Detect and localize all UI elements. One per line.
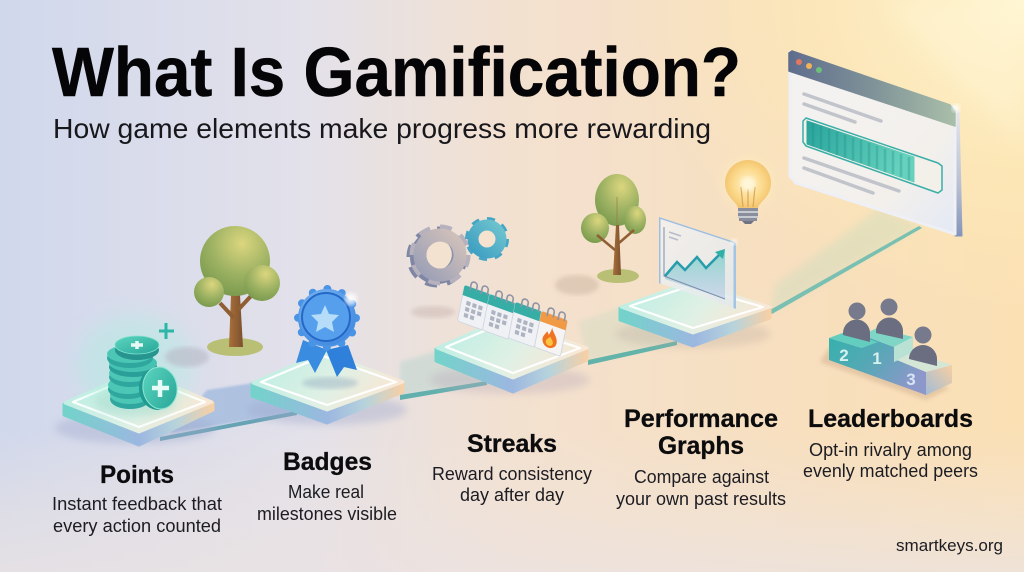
icon: light bulb bbox=[720, 155, 776, 224]
text block: badges bbox=[257, 448, 397, 524]
icon: tree small bbox=[555, 174, 646, 295]
text block: badges: milestones visible bbox=[257, 504, 397, 524]
text block: points: Points bbox=[100, 461, 174, 489]
text block: performance graphs: Compare against bbox=[634, 467, 769, 487]
text block: badges: Badges bbox=[283, 448, 372, 476]
platform: badges bbox=[247, 352, 407, 425]
source credit: smartkeys.org bbox=[896, 537, 1003, 555]
icon: streak calendars with flame bbox=[457, 279, 569, 356]
icon: podium with three people: 3 bbox=[906, 370, 916, 389]
title: What Is Gamification? bbox=[52, 33, 741, 111]
icon: gears bbox=[411, 220, 506, 318]
progress path bbox=[160, 208, 922, 441]
icon: ribbon badge bbox=[296, 289, 358, 389]
text block: leaderboards: Opt-in rivalry among bbox=[809, 440, 972, 460]
text block: performance graphs: Graphs bbox=[658, 432, 744, 460]
text block: leaderboards: Leaderboards bbox=[808, 405, 973, 433]
icon: tree bbox=[165, 226, 280, 367]
text block: leaderboards bbox=[803, 405, 978, 481]
text block: streaks: day after day bbox=[460, 485, 564, 505]
text block: performance graphs: your own past results bbox=[616, 489, 786, 509]
text block: streaks: Streaks bbox=[467, 430, 557, 458]
text block: badges: Make real bbox=[288, 482, 364, 502]
text block: performance graphs: Performance bbox=[624, 405, 778, 433]
platform: streaks bbox=[430, 319, 590, 394]
platform: performance graphs bbox=[615, 282, 771, 348]
platform: points bbox=[55, 371, 215, 445]
text block: leaderboards: evenly matched peers bbox=[803, 461, 978, 481]
subtitle: How game elements make progress more rewarding bbox=[53, 113, 711, 144]
icon: performance chart panel bbox=[659, 217, 737, 309]
text block: points: Instant feedback that bbox=[52, 494, 222, 514]
text block: points: every action counted bbox=[53, 516, 221, 536]
icon: podium with three people bbox=[820, 298, 952, 400]
icon: podium with three people: 2 bbox=[839, 346, 849, 365]
icon: coin stack with plus bbox=[77, 315, 193, 415]
icon: podium with three people: 1 bbox=[872, 349, 882, 368]
text block: streaks bbox=[432, 430, 592, 505]
text block: points bbox=[52, 461, 222, 536]
icon: browser window with progress bar bbox=[789, 51, 962, 236]
text block: streaks: Reward consistency bbox=[432, 464, 592, 484]
text block: performance graphs bbox=[616, 405, 786, 509]
